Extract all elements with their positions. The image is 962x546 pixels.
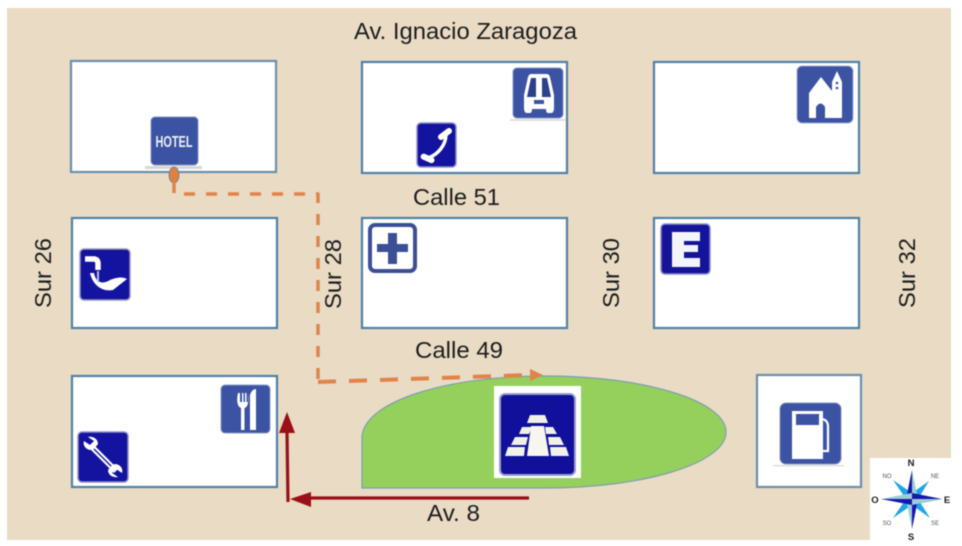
block: middle left — [72, 218, 277, 328]
icon: compass rose: E — [944, 495, 950, 506]
icon: compass rose: N — [908, 458, 915, 469]
icon: church — [797, 66, 853, 123]
street label: Av. Ignacio Zaragoza: Av. Ignacio Zaragoza — [354, 18, 577, 44]
street label: Sur 26: Sur 26 — [30, 238, 56, 308]
icon: hand washing — [80, 249, 130, 300]
icon: pyramid — [494, 386, 581, 478]
block: top centre — [362, 62, 567, 173]
icon: compass rose: S — [908, 532, 914, 543]
icon: compass rose: NE — [931, 474, 939, 480]
block: top left — [71, 61, 276, 172]
icon: compass rose: SO — [883, 521, 892, 527]
park: green area — [362, 376, 726, 488]
icon: parking E — [661, 224, 710, 274]
icon: bus — [510, 68, 566, 121]
icon: hotel — [145, 117, 202, 169]
icon: gas station — [773, 403, 844, 466]
icon: first aid cross — [370, 225, 415, 271]
orange dashed route from hotel to park — [169, 167, 543, 382]
block: middle centre — [362, 218, 567, 328]
street label: Av. 8: Av. 8 — [427, 500, 480, 526]
dark red arrow going north — [279, 412, 295, 502]
block: gas station — [757, 375, 861, 487]
icon: compass rose: NO — [882, 474, 892, 480]
block: bottom left — [72, 376, 277, 487]
street label: Calle 51: Calle 51 — [413, 184, 500, 210]
icon: compass rose: SE — [931, 521, 939, 527]
icon: restaurant — [221, 385, 270, 433]
street label: Sur 30: Sur 30 — [598, 238, 624, 308]
icon: hotel: HOTEL — [156, 134, 193, 151]
icon: compass rose — [870, 458, 952, 543]
street label: Sur 32: Sur 32 — [894, 238, 920, 308]
street label: Sur 28: Sur 28 — [320, 239, 346, 309]
icon: telephone — [417, 123, 456, 167]
dark red arrow along Av. 8 — [290, 492, 529, 507]
icon: compass rose: O — [871, 495, 879, 506]
street label: Calle 49: Calle 49 — [415, 337, 503, 363]
block: middle right — [654, 218, 859, 328]
icon: mechanic wrench — [78, 432, 128, 482]
block: top right — [654, 62, 859, 173]
